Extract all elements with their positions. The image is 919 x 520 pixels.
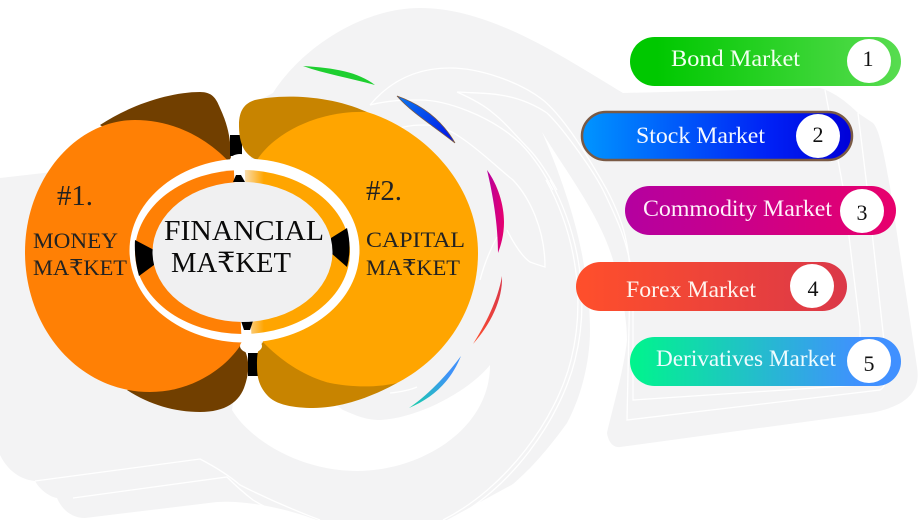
- right segment: capital market: [239, 97, 478, 408]
- orange inner band right: [244, 170, 350, 334]
- capital market label: #2.: [366, 176, 402, 207]
- pill: forex market: [576, 262, 847, 311]
- money market label: [33, 181, 128, 280]
- center title: FINANCIAL: [164, 216, 324, 247]
- gold tab backing: [239, 97, 397, 408]
- sliver: blue: [397, 96, 455, 143]
- pill: stock market: Stock Market: [636, 123, 766, 148]
- money market label: #1.: [57, 181, 93, 212]
- center title: MA₹KET: [171, 248, 291, 279]
- sliver: red: [473, 276, 502, 344]
- orange body: [244, 112, 478, 386]
- pill: forex market: 4: [808, 276, 818, 301]
- pill: bond market: Bond Market: [671, 46, 801, 71]
- sliver: green: [303, 66, 375, 85]
- sliver: magenta: [487, 170, 504, 253]
- black wedge bottom: [241, 321, 253, 330]
- orange body: [25, 120, 244, 392]
- pill: bond market: 1: [862, 46, 874, 71]
- brown bottom tab: [127, 343, 248, 412]
- black wedge left: [135, 240, 154, 276]
- brown top tab: [100, 92, 231, 160]
- pill: bond market: [630, 37, 901, 86]
- pill: commodity market: 3: [856, 200, 868, 225]
- pill: derivatives market: 5: [864, 351, 874, 376]
- pill: derivatives market: [630, 337, 901, 386]
- capital market label: CAPITAL: [366, 227, 465, 252]
- sliver: teal blue: [409, 356, 461, 408]
- left segment: money market: [25, 92, 258, 412]
- central ring: [130, 154, 360, 353]
- pill: commodity market: [625, 186, 896, 235]
- center title: [164, 216, 324, 279]
- pill: commodity market: Commodity Market: [643, 196, 833, 221]
- money market label: MONEY: [33, 228, 118, 253]
- pill: stock market: 2: [812, 122, 824, 147]
- black wedge top: [233, 175, 245, 182]
- pill: stock market: [582, 112, 852, 160]
- capital market label: MA₹KET: [366, 255, 461, 280]
- black wedge right: [331, 228, 350, 267]
- pill: forex market: Forex Market: [626, 277, 757, 302]
- black connector top: [230, 135, 242, 156]
- center disc: [152, 182, 332, 322]
- money market label: MA₹KET: [33, 255, 128, 280]
- black connector bottom: [248, 353, 258, 376]
- orange inner band left: [135, 170, 242, 334]
- white outer ring: [130, 158, 360, 342]
- capital market label: [366, 176, 465, 280]
- pill: derivatives market: Derivatives Market: [656, 346, 837, 371]
